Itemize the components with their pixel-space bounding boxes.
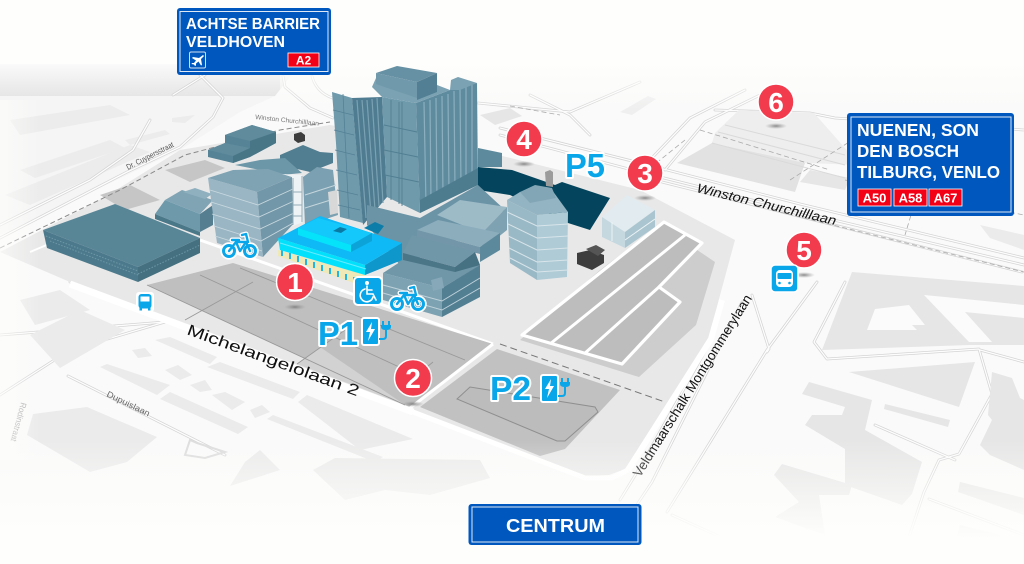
building: dark navy P5 block	[478, 167, 610, 230]
road sign: Centrum: CENTRUM	[506, 516, 605, 536]
marker 1	[276, 264, 314, 310]
building: main tower	[332, 66, 502, 225]
road sign: Achtse Barrier	[177, 8, 331, 75]
top right parking field	[480, 96, 1024, 250]
label P2: P2	[490, 370, 531, 407]
route badge A2: A2	[296, 54, 311, 68]
hospital site ground	[0, 122, 735, 478]
icon: bus stop small	[136, 292, 154, 312]
route badge A67	[929, 189, 962, 206]
marker 2: 2	[405, 363, 421, 394]
icon: EV charger P1	[362, 318, 391, 345]
road sign: Nuenen	[847, 113, 1014, 216]
icon: bus stop large	[771, 265, 798, 292]
bottom fade	[0, 440, 1024, 564]
marker 6: 6	[768, 87, 784, 118]
icon: bicycle south	[391, 287, 424, 310]
street label: Dupuislaan: Dupuislaan	[105, 389, 152, 419]
parking P2 surface	[420, 344, 665, 456]
building: white-blue corner block	[602, 195, 655, 248]
street label: Rodinstraat: Rodinstraat	[9, 401, 29, 443]
building: low wing behind tower	[367, 185, 505, 265]
road sign: Centrum	[468, 504, 642, 545]
icon: EV charger P2	[541, 375, 570, 402]
building: bright blue main entrance	[278, 216, 402, 287]
marker 4	[506, 121, 542, 167]
building: tall left block	[208, 169, 303, 257]
marker 1: 1	[287, 267, 303, 298]
route badge A50	[858, 189, 891, 206]
building: tall light block	[507, 185, 568, 280]
route badge A67: A67	[934, 190, 957, 206]
marker 2	[394, 360, 432, 407]
marker 6	[758, 84, 794, 129]
route badge A2	[288, 53, 319, 68]
marker 4: 4	[516, 124, 532, 155]
parking area P3 surroundings	[520, 225, 715, 377]
route badge A58: A58	[899, 190, 922, 206]
building: back wing	[155, 188, 213, 236]
street label: Winston Churchilllaan: Winston Churchilllaan	[695, 180, 838, 228]
label P5: P5	[565, 147, 605, 184]
sign text: Veldhoven: VELDHOVEN	[186, 34, 285, 51]
building: dark service boxes	[577, 245, 605, 270]
sign text: Achtse Barrier: ACHTSE BARRIER	[186, 16, 320, 33]
icon: bicycle north	[223, 234, 256, 257]
top fade	[280, 60, 1024, 110]
marker 5	[786, 232, 822, 278]
street label: small Winston Churchilllaan: Winston Churchilllaan	[255, 114, 320, 128]
route badge A58	[894, 189, 927, 206]
sign text: Den Bosch: DEN BOSCH	[857, 141, 959, 161]
street label: Dr. Cuypersstraat: Dr. Cuypersstraat	[125, 140, 176, 172]
left fade	[0, 100, 40, 460]
label P1: P1	[318, 315, 358, 352]
parking P1 surface	[147, 263, 493, 408]
icon: airplane	[190, 52, 206, 68]
marker 3: 3	[637, 158, 653, 189]
icon: wheelchair	[354, 277, 382, 305]
building: central stepped block	[383, 200, 507, 317]
marker 5: 5	[796, 235, 812, 266]
building: parking garage	[43, 204, 200, 282]
lower left houses	[20, 290, 490, 500]
street label: Veldmaarschalk Montgommerylaan: Veldmaarschalk Montgommerylaan	[630, 292, 755, 480]
lower right blocks	[774, 272, 1024, 564]
building: small dark box at rear	[294, 132, 305, 143]
sign text: Tilburg, Venlo: TILBURG, VENLO	[857, 162, 1000, 182]
parking P3 strips	[522, 222, 702, 364]
building: rear blocks	[208, 125, 338, 226]
route badge A50: A50	[863, 190, 886, 206]
sign text: Nuenen, Son: NUENEN, SON	[857, 120, 979, 140]
marker 3	[627, 155, 663, 201]
street label: Michelangelolaan 2: Michelangelolaan 2	[185, 322, 361, 400]
